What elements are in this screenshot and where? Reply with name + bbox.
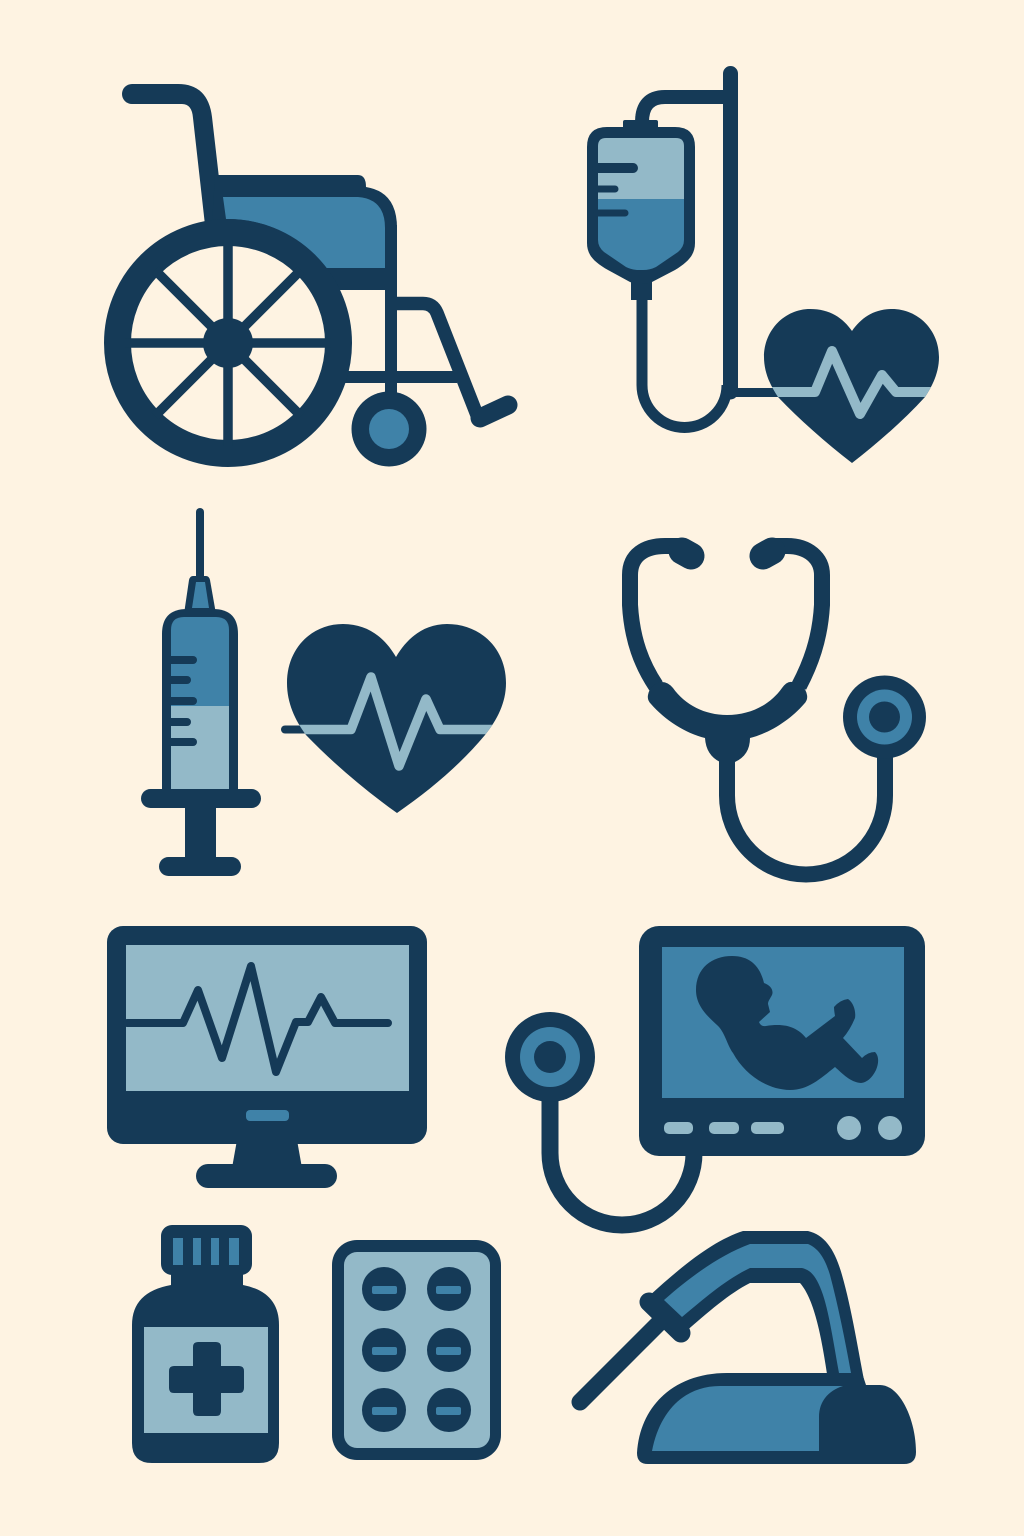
icon: ultrasound probe (580, 1231, 916, 1464)
yoke (648, 682, 807, 762)
fetus silhouette (696, 956, 878, 1090)
transducer head (505, 1012, 595, 1102)
icon: wheelchair (118, 84, 508, 466)
icon: syringe (141, 508, 261, 876)
seat back (212, 175, 397, 270)
seat cushion (223, 197, 385, 268)
plunger (141, 789, 261, 876)
control buttons (664, 1116, 902, 1140)
push handle (122, 84, 226, 225)
monitor body (107, 926, 427, 1144)
ear tips (682, 551, 772, 556)
needle (196, 508, 204, 580)
icon: large heart with pulse (285, 624, 510, 813)
heart with pulse (760, 309, 945, 463)
medical icon set (104, 66, 939, 1464)
machine body (639, 926, 925, 1156)
transducer cable (550, 1095, 694, 1225)
pills (362, 1267, 471, 1432)
probe base panel (652, 1386, 843, 1451)
bottle label (144, 1327, 268, 1433)
ECG trace (127, 966, 388, 1072)
icon: blister pack (332, 1240, 501, 1460)
barrel (162, 609, 238, 796)
probe base (637, 1373, 916, 1464)
IV bag (587, 120, 695, 300)
large wheel (118, 232, 338, 454)
icon: ultrasound machine (505, 926, 925, 1225)
needle hub (184, 576, 216, 614)
icon: IV drip with heart (587, 74, 945, 463)
probe arm highlight (664, 1244, 851, 1373)
IV pole and hook (642, 74, 785, 428)
bottle body (132, 1270, 279, 1463)
medical cross (169, 1342, 244, 1416)
ultrasound screen (662, 947, 904, 1098)
pack foil (344, 1252, 490, 1448)
wheelchair frame (320, 225, 508, 418)
icon: medicine bottle (132, 1225, 279, 1463)
icon: ECG monitor (107, 926, 427, 1188)
chest piece (843, 676, 926, 758)
icon: stethoscope (630, 546, 926, 874)
probe collar (649, 1302, 681, 1333)
monitor screen (126, 945, 409, 1091)
ear tubes (630, 546, 822, 686)
pack outline (332, 1240, 501, 1460)
lower tube (727, 750, 885, 874)
probe cable (580, 1320, 662, 1402)
monitor stand (196, 1140, 337, 1188)
power button (246, 1110, 289, 1121)
front caster (352, 392, 426, 466)
bottle cap (161, 1225, 252, 1275)
probe arm (648, 1231, 866, 1390)
